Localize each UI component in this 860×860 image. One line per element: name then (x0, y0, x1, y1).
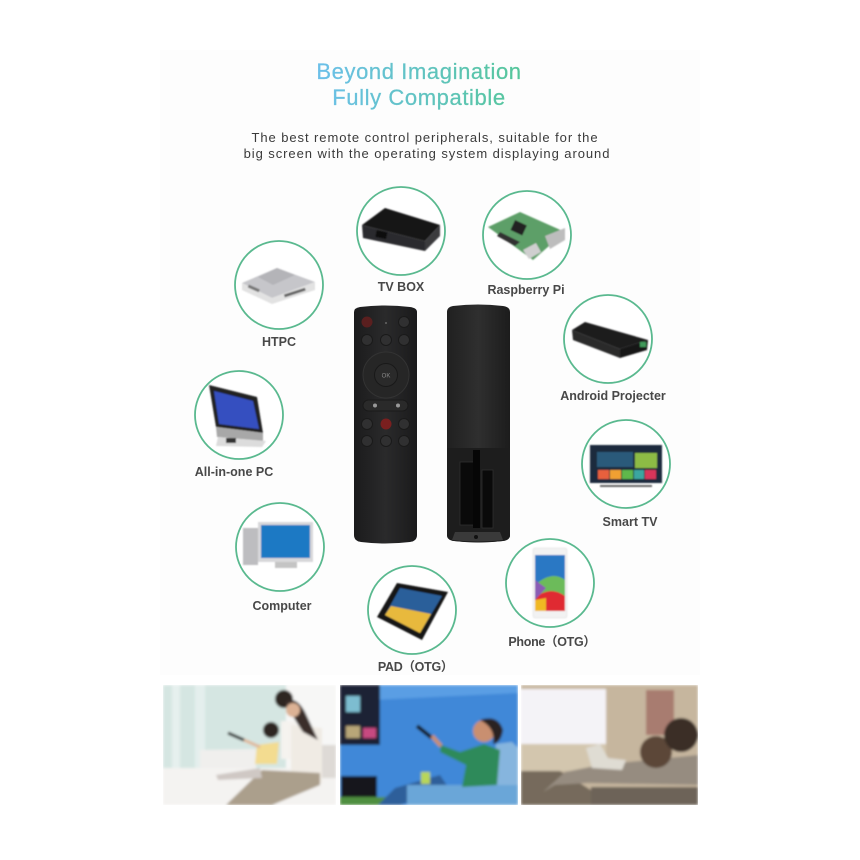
subtitle: big screen with the operating system displaying around (244, 146, 610, 161)
power button (362, 316, 372, 328)
device: Raspberry Pi (483, 191, 571, 297)
photo: family on sofa (163, 685, 336, 805)
photo: man in blue room (340, 685, 518, 805)
device: Android Projecter: Android Projecter (560, 389, 666, 403)
device: TV BOX (357, 187, 445, 294)
navigation ring (363, 352, 409, 398)
device: Phone (OTG): Phone（OTG） (508, 635, 596, 649)
remote control: front (354, 306, 417, 544)
device: Smart TV: Smart TV (603, 515, 658, 529)
device: Phone (OTG) (506, 539, 596, 649)
device: HTPC (235, 241, 323, 349)
subtitle (244, 130, 610, 161)
device: Smart TV (582, 420, 670, 529)
device: HTPC: HTPC (262, 335, 296, 349)
title (316, 59, 522, 110)
remote control: back (447, 304, 510, 542)
device: Raspberry Pi: Raspberry Pi (487, 283, 565, 297)
mic button (380, 418, 392, 430)
remote control: front: OK (382, 374, 390, 380)
device: PAD (OTG) (368, 566, 456, 674)
title: Fully Compatible (332, 85, 506, 110)
device: TV BOX: TV BOX (378, 280, 425, 294)
device: Android Projecter (560, 295, 666, 403)
device: Computer (236, 503, 324, 613)
subtitle: The best remote control peripherals, suitable for the (251, 130, 599, 145)
device: All-in-one PC (195, 371, 283, 479)
background panel (160, 50, 700, 675)
device: All-in-one PC: All-in-one PC (195, 465, 273, 479)
device: PAD (OTG): PAD（OTG） (378, 660, 453, 674)
device: Computer: Computer (252, 599, 312, 613)
title: Beyond Imagination (316, 59, 522, 84)
photo: couple watching TV (521, 685, 698, 805)
